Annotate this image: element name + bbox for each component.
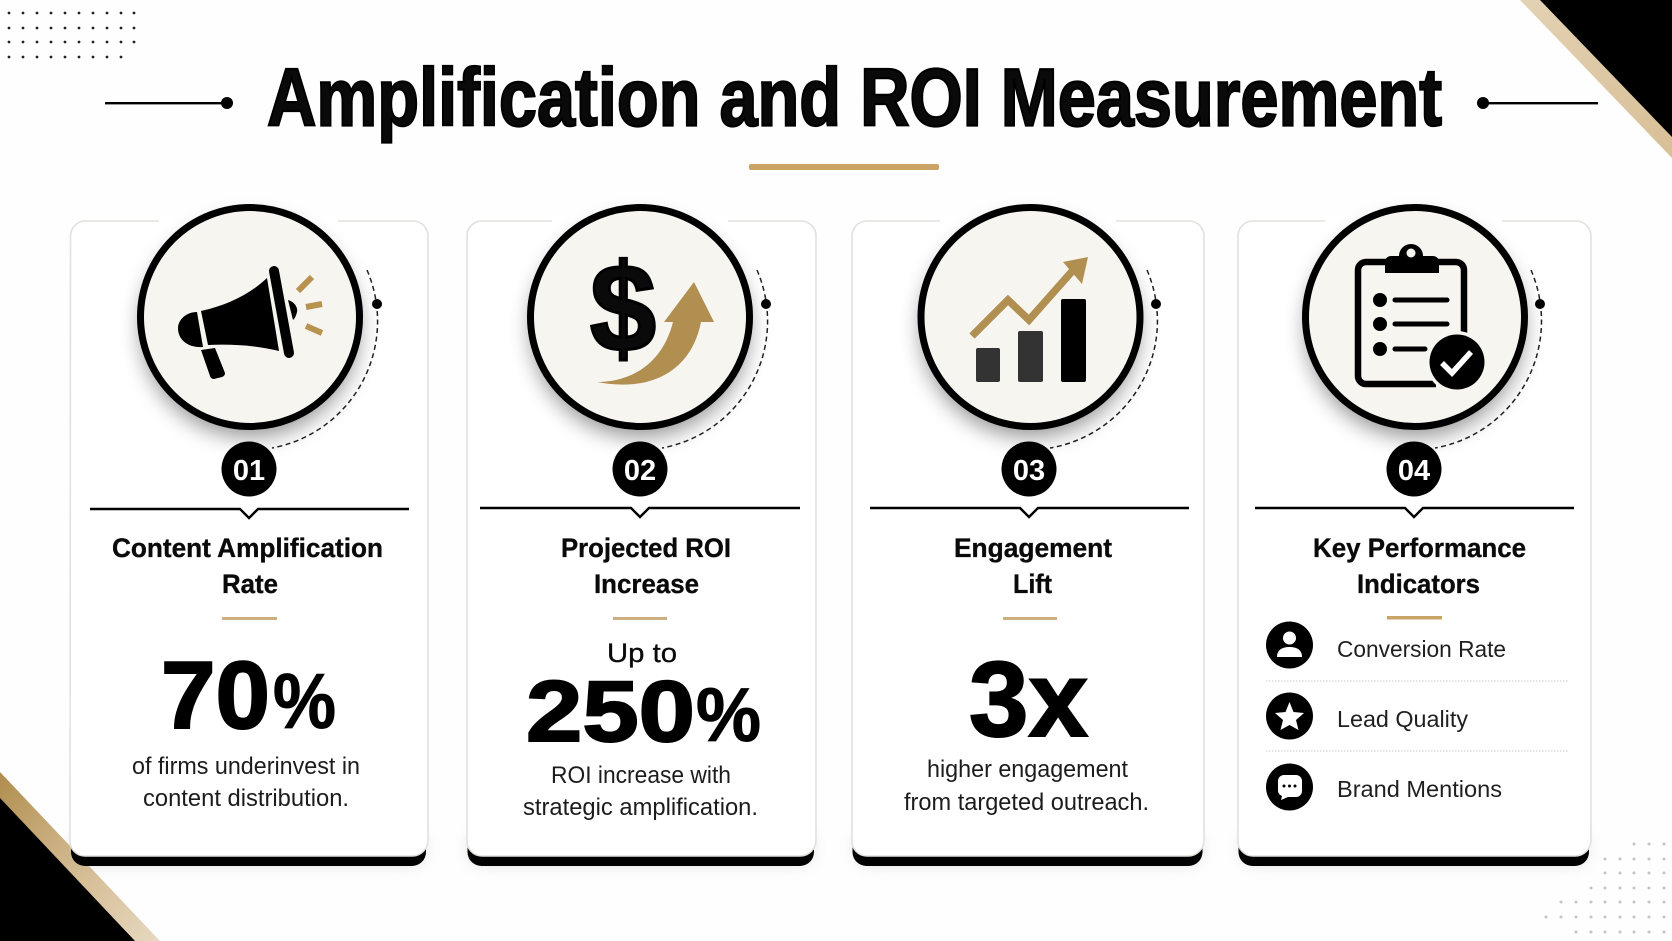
number badge <box>612 442 668 496</box>
dashed orbit <box>662 270 768 448</box>
description: content distribution. <box>143 785 349 812</box>
description: of firms underinvest in <box>132 753 360 780</box>
dashed orbit <box>272 270 378 448</box>
stat: % <box>696 673 761 758</box>
stat <box>526 638 761 760</box>
title: Amplification and ROI Measurement <box>267 52 1442 144</box>
orbit dot <box>1151 299 1161 309</box>
icon: growth chart <box>921 208 1140 426</box>
stat <box>161 642 336 749</box>
heading: Increase <box>594 569 699 599</box>
title ornament: left line <box>105 97 233 109</box>
description <box>904 756 1149 816</box>
heading: Rate <box>222 569 278 599</box>
stat: 3x <box>969 639 1088 759</box>
dot pattern: top left <box>8 12 135 58</box>
number badge: 01 <box>233 455 265 487</box>
icon: clipboard checklist <box>1306 208 1524 426</box>
description: ROI increase with <box>551 762 731 789</box>
dashed orbit <box>1050 270 1157 448</box>
panel: content amplification rate <box>70 208 428 866</box>
gold bar <box>222 617 277 620</box>
heading <box>1313 533 1526 599</box>
description <box>132 753 360 812</box>
stat: 70 <box>161 642 270 749</box>
icon circle shadow <box>531 219 749 437</box>
kpi: conversion rate: Conversion Rate <box>1337 636 1506 662</box>
heading <box>561 533 731 599</box>
heading: Lift <box>1013 569 1052 599</box>
stat: Up to <box>607 638 677 668</box>
description: from targeted outreach. <box>904 789 1149 816</box>
corner accent: top right <box>1520 0 1672 158</box>
orbit dot <box>1535 299 1545 309</box>
description <box>523 762 758 821</box>
kpi divider <box>1266 680 1569 682</box>
panel: projected roi increase <box>467 208 816 866</box>
heading <box>954 533 1112 599</box>
icon: dollar and arrow: $ <box>590 240 656 378</box>
description: higher engagement <box>927 756 1128 783</box>
kpi divider <box>1266 750 1569 752</box>
number badge: 02 <box>624 455 656 487</box>
gold bar <box>1003 617 1057 620</box>
number badge: 03 <box>1013 455 1045 487</box>
number badge: 04 <box>1398 455 1430 487</box>
icon circle shadow <box>921 219 1139 437</box>
divider with notch <box>1255 508 1574 517</box>
heading: Engagement <box>954 533 1112 563</box>
divider with notch <box>480 508 800 517</box>
kpi: brand mentions <box>1266 764 1502 810</box>
dot pattern: bottom right <box>1544 842 1666 934</box>
heading <box>112 533 383 599</box>
orbit dot <box>372 299 382 309</box>
orbit dot <box>761 299 771 309</box>
number badge <box>1002 442 1056 496</box>
heading: Projected ROI <box>561 533 731 563</box>
corner accent: bottom left <box>0 772 160 941</box>
heading: Key Performance <box>1313 533 1526 563</box>
icon: megaphone <box>140 208 360 426</box>
panel: engagement lift <box>852 208 1204 866</box>
icon circle shadow <box>141 219 359 437</box>
dashed orbit <box>1435 270 1541 448</box>
number badge <box>222 442 276 496</box>
description: strategic amplification. <box>523 794 758 821</box>
kpi: lead quality: Lead Quality <box>1337 706 1468 732</box>
heading: Indicators <box>1357 569 1480 599</box>
divider with notch <box>870 508 1189 517</box>
panel: key performance indicators <box>1238 208 1591 866</box>
icon circle shadow <box>1306 219 1524 437</box>
gold bar <box>1387 616 1442 620</box>
kpi: brand mentions: Brand Mentions <box>1337 776 1502 802</box>
stat: % <box>273 657 336 745</box>
title ornament: right line <box>1477 97 1598 109</box>
divider with notch <box>90 509 409 518</box>
gold bar <box>613 617 667 620</box>
stat: 250 <box>526 664 695 760</box>
kpi: lead quality <box>1266 692 1468 740</box>
icon: dollar and arrow <box>530 208 750 426</box>
kpi: conversion rate <box>1266 622 1506 668</box>
title underline <box>749 164 939 170</box>
heading: Content Amplification <box>112 533 383 563</box>
number badge <box>1386 442 1442 496</box>
